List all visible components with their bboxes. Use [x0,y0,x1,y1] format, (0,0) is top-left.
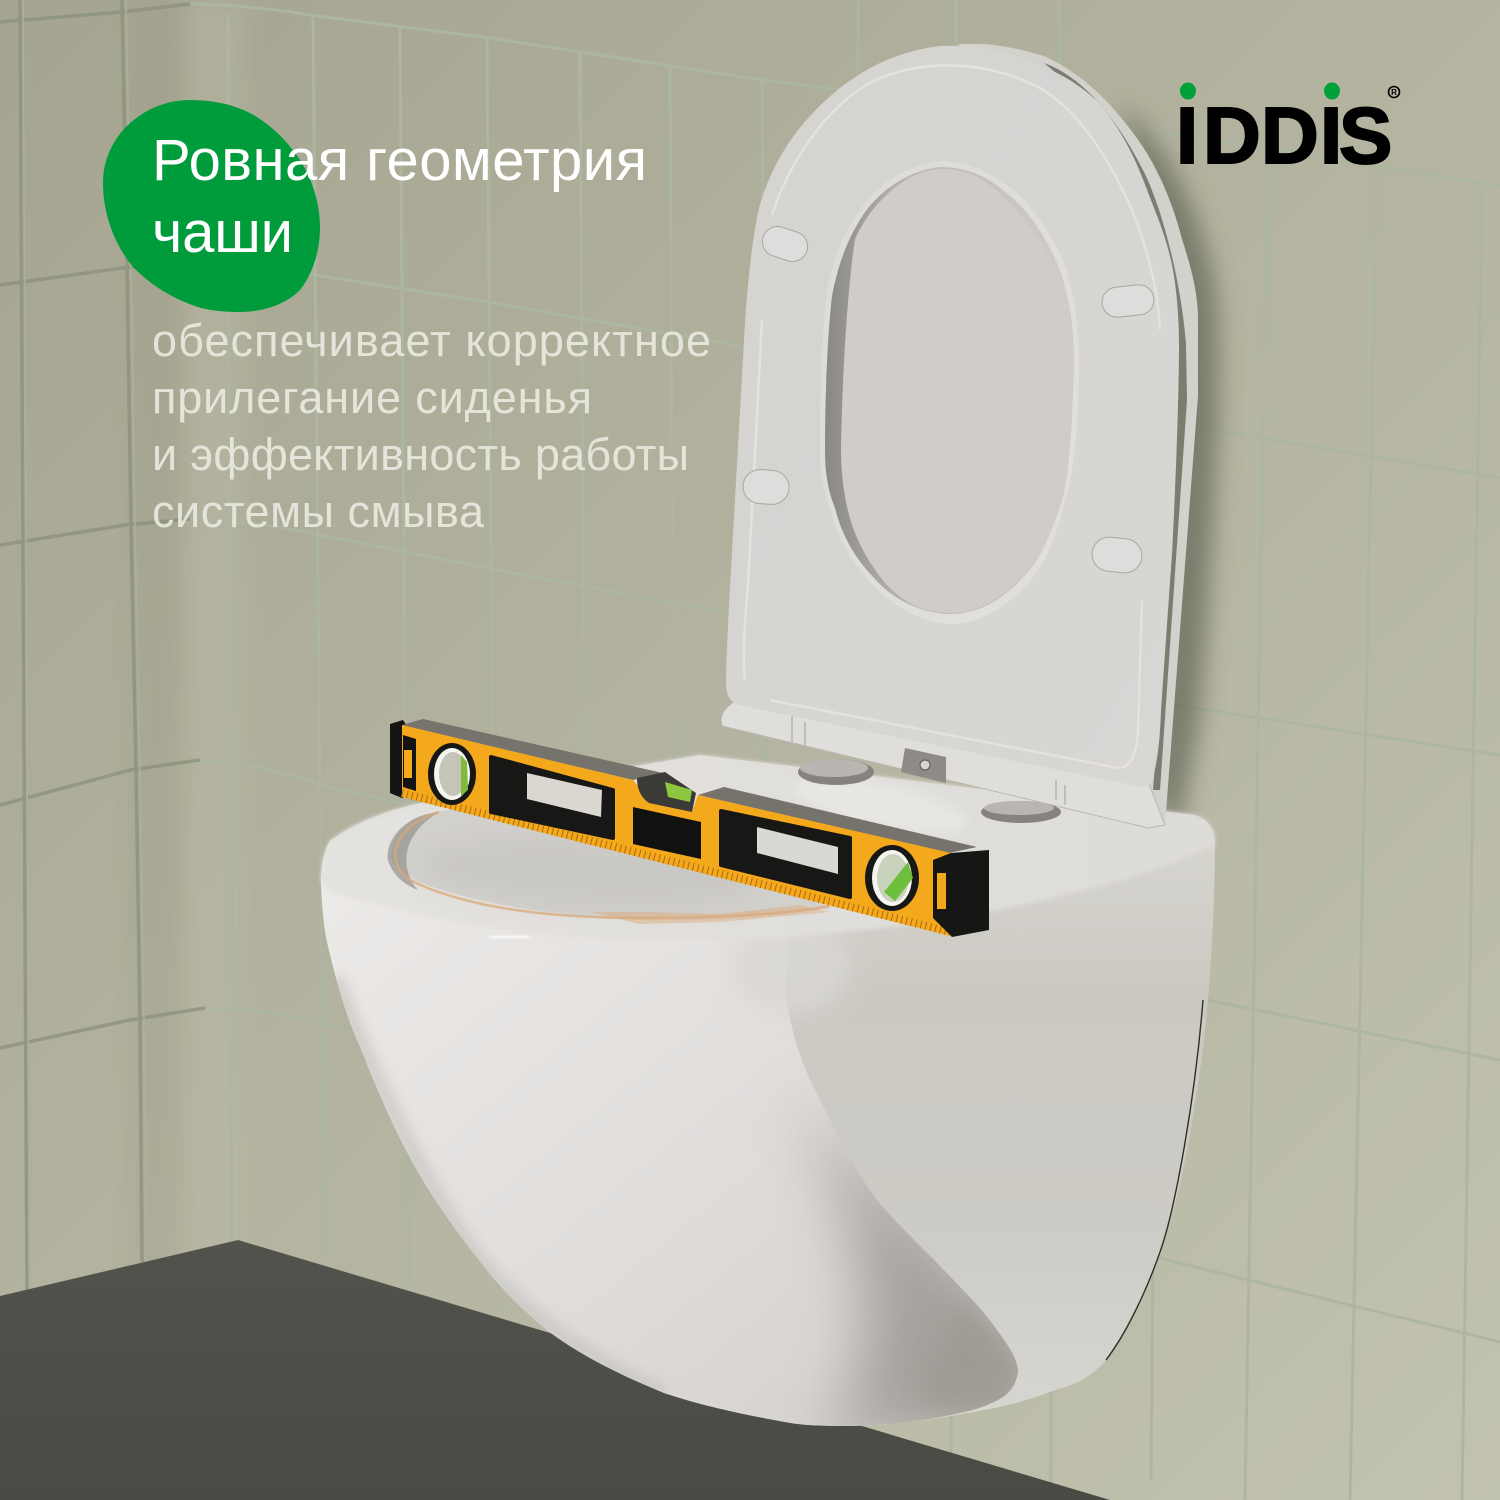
heading [152,128,647,265]
soft blend at top of shading boundary [730,915,850,1015]
bowl body [321,755,1215,1426]
description: прилегание сиденья [152,372,592,423]
opening shadow crescent [388,812,439,890]
description: системы смыва [152,486,485,537]
toilet bowl [300,755,1215,1440]
hinge clip [901,748,946,783]
bowl rim surface [321,755,1215,941]
orange reflection of the level [395,812,830,918]
heading: Ровная геометрия [152,128,647,193]
bowl interior [418,829,762,915]
floor [0,1240,1110,1500]
deck reflection [788,767,972,843]
lighter rounded corner band [185,0,245,1300]
seat opening surface [841,169,1074,613]
level ruler ticks [402,793,950,932]
lid [726,46,1179,787]
description [152,315,711,537]
bumper top left [758,223,812,265]
IDDIS logo: R [1391,88,1397,97]
bowl opening [391,790,830,920]
level left end [390,720,416,798]
spirit level [390,719,989,937]
bumper lower left [742,468,790,506]
description: обеспечивает корректное [152,315,711,366]
bowl right contour [1106,1000,1203,1360]
level left vial [428,743,476,805]
level top right band [698,787,977,853]
level left slot [403,735,416,791]
hinge band [721,702,1165,828]
IDDIS logo: IDDIS [1176,91,1392,180]
bumper lower right [1090,535,1144,575]
level top left band [402,719,663,780]
bowl front shading [798,1114,1018,1426]
level notch with vial [637,772,696,812]
heading: чаши [152,200,293,265]
bowl front lighter volume [321,841,1018,1426]
level right end [933,850,989,937]
level centre plate [633,807,701,859]
bumper top right [1101,283,1155,319]
seat opening shadow [825,167,1074,614]
hinge fixings [798,759,1061,823]
rim highlight [490,936,530,938]
seat shadow on wall [1120,105,1219,830]
seat opening ring [820,161,1079,624]
bowl left edge shading [336,978,664,1393]
description: и эффективность работы [152,429,689,480]
level right handle [721,811,850,897]
gap between seat and lid [1044,63,1187,790]
lid inner rim line [744,65,1160,768]
level left handle [491,757,613,838]
green blob [103,100,320,312]
level right vial [865,845,919,911]
level body [402,725,951,936]
seat rear layer [958,44,1198,828]
seat and lid [721,44,1198,828]
